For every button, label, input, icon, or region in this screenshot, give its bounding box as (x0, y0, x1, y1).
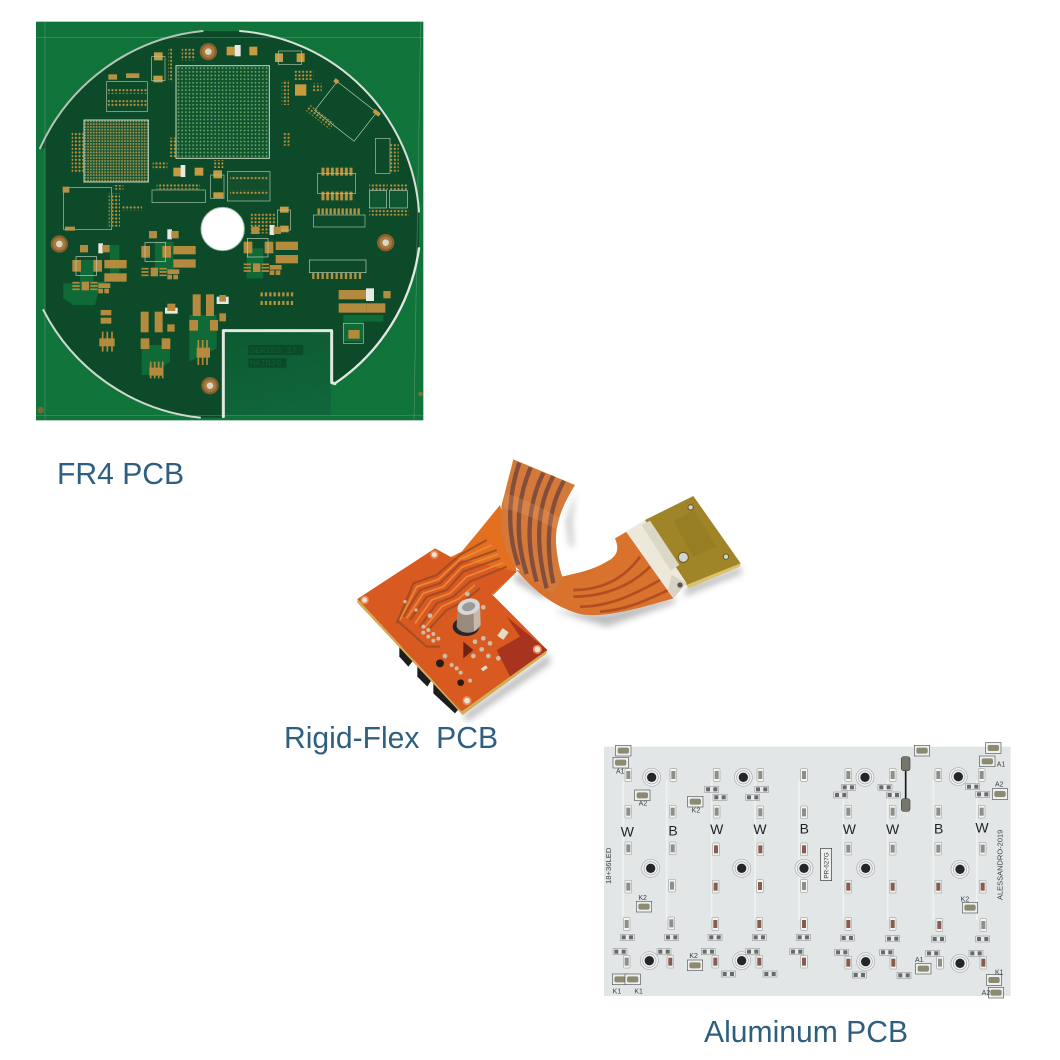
string colour letters: W (975, 819, 989, 835)
dark circular copper area (40, 31, 419, 418)
maker label ALESSANDRO-2019: ALESSANDRO-2019 (995, 830, 1004, 900)
string colour letters: B (934, 820, 943, 836)
white board substrate (604, 747, 1011, 996)
panel: FR4 PCB board (36, 22, 423, 420)
faint silk marking on tab: MAIN30 (250, 359, 281, 369)
string colour letters: B (668, 822, 678, 838)
border trace lines (36, 22, 423, 420)
silkscreen pad labels: K2 (692, 807, 700, 814)
small SMD pairs (613, 784, 990, 978)
second BGA chip (84, 120, 148, 182)
mounting holes (37, 43, 423, 413)
faint silk marking on tab (248, 345, 303, 369)
part number box PR-627G: PR-627G (823, 852, 830, 879)
panel: Rigid-Flex PCB photo (357, 459, 742, 722)
connector blocks under rigid board (399, 645, 461, 713)
silkscreen pad labels: A1 (616, 768, 625, 775)
faint silk marking on tab: SERIES_17 (250, 346, 297, 356)
silkscreen pad labels: K1 (613, 988, 621, 995)
string colour letters: B (800, 820, 809, 836)
large BGA chip (176, 66, 269, 158)
routed white slots (40, 31, 419, 418)
silkscreen pad labels: K1 (995, 969, 1004, 976)
pale vertical traces (623, 780, 977, 920)
silkscreen pad labels: A2 (639, 801, 647, 808)
black via holes (436, 659, 464, 686)
panel: Aluminum PCB board (604, 743, 1011, 998)
thin flex tail behind ribbon (450, 505, 517, 595)
mounting holes (640, 768, 969, 972)
board edge (357, 599, 547, 715)
white pin connector (626, 520, 687, 598)
silkscreen pad labels: A1 (915, 957, 924, 964)
caption: FR4 PCB: FR4 PCB (57, 458, 184, 491)
board outer green substrate (36, 22, 423, 420)
silkscreen pad labels: K1 (634, 988, 643, 995)
silkscreen pad labels: K2 (638, 895, 647, 902)
LED columns (623, 769, 987, 969)
green copper pours for power blocks (63, 242, 383, 375)
jumper wire link (901, 757, 910, 811)
board id label 18+36LED: 18+36LED (604, 847, 613, 884)
dark shaded region on board (497, 617, 547, 677)
solder pads and vias (403, 592, 509, 683)
string colour letters: W (710, 821, 724, 837)
string colour letters (621, 819, 989, 840)
caption: Rigid-Flex PCB: Rigid-Flex PCB (284, 722, 498, 755)
silkscreen pad labels (613, 762, 1005, 997)
rectangular notch tab (224, 331, 331, 415)
part number box PR-627G (821, 848, 832, 881)
yellow-olive connector board (645, 496, 741, 585)
silkscreen pad labels: K2 (689, 953, 698, 960)
string colour letters: W (886, 821, 900, 837)
silkscreen pad labels: A1 (997, 762, 1005, 769)
centre hole (201, 207, 244, 251)
silkscreen pad labels: A2 (982, 990, 990, 997)
board holes (678, 505, 729, 562)
silkscreen pad labels: K2 (961, 896, 969, 903)
electrolytic capacitor (453, 596, 482, 636)
lower ribbon traces (573, 557, 668, 612)
ribbon highlight band (503, 493, 560, 530)
rigid orange-red board (357, 548, 547, 712)
string colour letters: W (621, 824, 635, 840)
string colour letters: W (753, 821, 767, 837)
soft drop shadows (463, 490, 742, 722)
mounting holes on rigid board (361, 551, 541, 704)
caption: Aluminum PCB: Aluminum PCB (704, 1016, 908, 1049)
board traces (397, 540, 507, 647)
string colour letters: W (843, 821, 857, 837)
larger solder pads (612, 743, 1008, 998)
ribbon brown stripes (510, 463, 564, 588)
ribbon upper band (501, 459, 575, 593)
flex lower loop (517, 532, 673, 615)
silkscreen pad labels: A2 (995, 782, 1004, 789)
power supply blocks (72, 225, 391, 378)
via and pad fields (63, 45, 409, 305)
